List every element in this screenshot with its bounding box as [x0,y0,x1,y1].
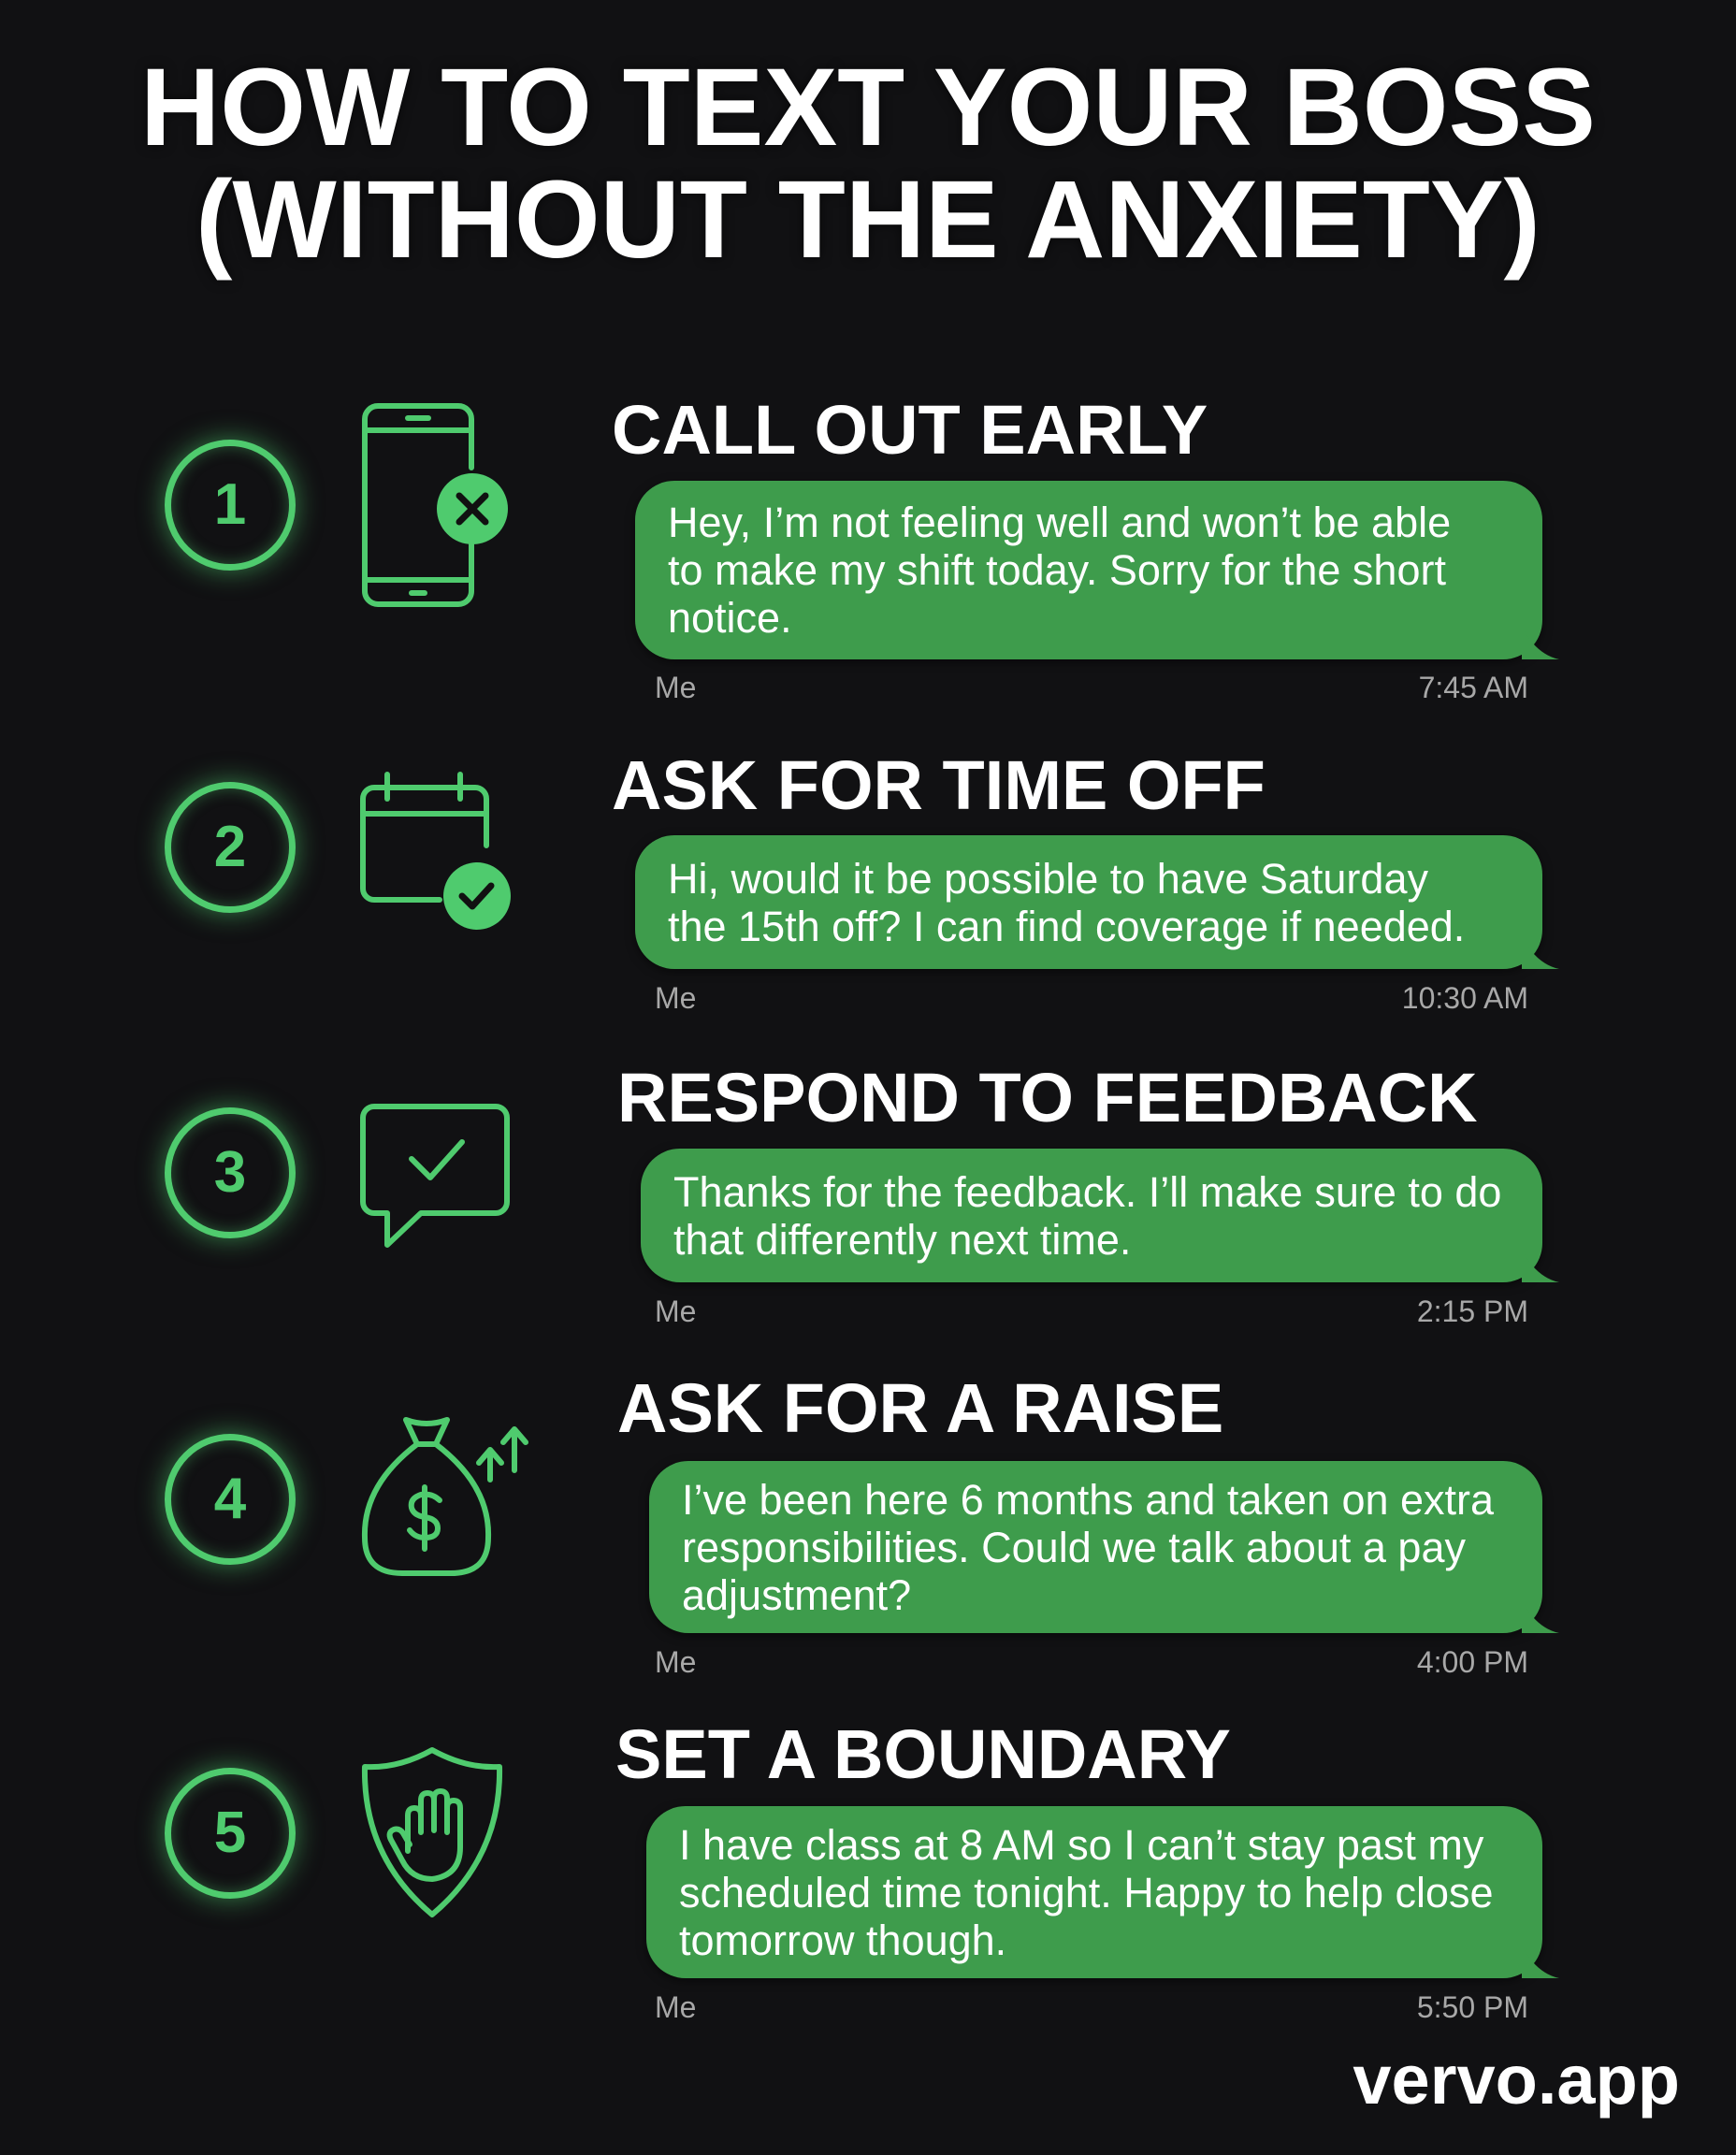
message bubble [646,1806,1542,1978]
message bubble [635,835,1542,969]
icon: phone with x [362,403,508,607]
number circle 1 [165,440,296,571]
number circle 5: 5 [214,1801,246,1865]
step 2 [148,746,1559,1015]
message bubble: the 15th off? I can find coverage if needed. [668,902,1465,950]
meta: 2:15 PM [1417,1294,1528,1328]
message bubble [649,1461,1542,1633]
meta: Me [655,981,696,1015]
meta: Me [655,1990,696,2024]
icon: speech bubble check [360,1104,510,1248]
heading: RESPOND TO FEEDBACK [617,1059,1478,1136]
meta: Me [655,671,696,704]
step 4 [148,1369,1559,1679]
icon: shield with hand [361,1747,503,1917]
meta [655,1990,1528,2024]
message bubble: adjustment? [682,1571,911,1618]
meta: Me [655,1645,696,1679]
meta: 4:00 PM [1417,1645,1528,1679]
message bubble: that differently next time. [673,1216,1131,1263]
meta [655,671,1528,704]
message bubble: to make my shift today. Sorry for the short [668,546,1446,594]
title: (WITHOUT THE ANXIETY) [195,158,1541,282]
number circle 2: 2 [214,815,246,879]
meta: 10:30 AM [1402,981,1528,1015]
icon: money bag with arrow [361,1417,528,1576]
heading: CALL OUT EARLY [612,391,1208,469]
number circle 2 [165,782,296,913]
step 3 [148,1059,1559,1328]
number circle 4: 4 [214,1467,246,1531]
number circle 3: 3 [214,1140,246,1205]
heading: ASK FOR TIME OFF [612,746,1266,824]
message bubble: I have class at 8 AM so I can’t stay past my [679,1820,1483,1869]
message bubble: responsibilities. Could we talk about a pay [682,1523,1466,1571]
number circle 4 [165,1434,296,1565]
title [140,46,1596,282]
number circle 3 [165,1107,296,1238]
heading: SET A BOUNDARY [615,1715,1231,1793]
meta: 5:50 PM [1417,1990,1528,2024]
message bubble [641,1149,1542,1282]
meta [655,981,1528,1015]
meta: Me [655,1294,696,1328]
step 1 [148,391,1559,704]
title: HOW TO TEXT YOUR BOSS [140,46,1596,169]
message bubble: Hey, I’m not feeling well and won’t be able [668,499,1451,546]
message bubble: tomorrow though. [679,1916,1006,1964]
icon: calendar with check [360,772,511,930]
step 5 [148,1715,1559,2024]
message bubble: Hi, would it be possible to have Saturday [668,855,1428,902]
brand footer: vervo.app [1353,2041,1680,2119]
message bubble: notice. [668,594,792,642]
message bubble [635,481,1542,659]
message bubble: Thanks for the feedback. I’ll make sure to do [673,1167,1501,1216]
message bubble: scheduled time tonight. Happy to help close [679,1869,1494,1916]
number circle 5 [165,1768,296,1899]
heading: ASK FOR A RAISE [617,1369,1223,1447]
number circle 1: 1 [214,472,246,537]
message bubble: I’ve been here 6 months and taken on extra [682,1476,1494,1523]
meta [655,1294,1528,1328]
meta [655,1645,1528,1679]
meta: 7:45 AM [1419,671,1528,704]
